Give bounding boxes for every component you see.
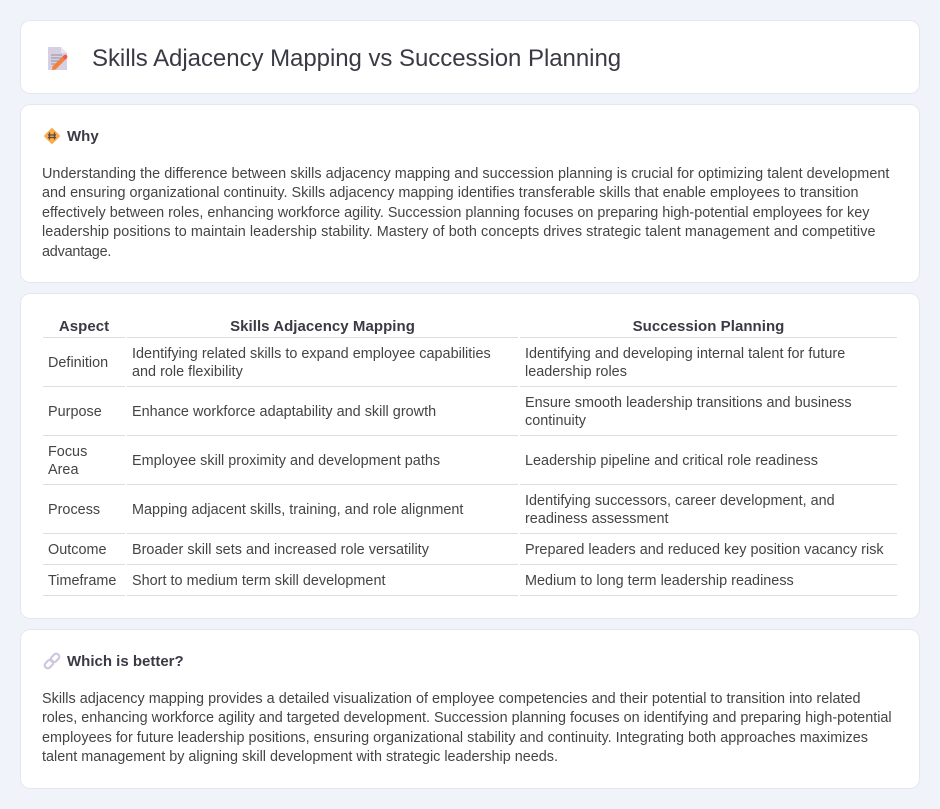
table row: process: readiness assessment xyxy=(525,511,669,527)
table row: purpose xyxy=(43,395,897,436)
table header row xyxy=(43,318,897,338)
table row: timeframe: Short to medium term skill development xyxy=(132,573,386,589)
table row: outcome: Broader skill sets and increased role versatility xyxy=(132,542,429,558)
text block: why paragraph: Understanding the difference between skills adjacency mapping and succession planning is crucial for optimizing talent development xyxy=(42,166,889,182)
table row: process: Identifying successors, career development, and xyxy=(525,493,835,509)
table row: focus area: Focus xyxy=(48,444,87,460)
icon: chain link xyxy=(44,652,60,670)
text block: why paragraph xyxy=(42,166,890,260)
table row: purpose: Enhance workforce adaptability and skill growth xyxy=(132,404,436,420)
table row: definition: Definition xyxy=(48,355,108,371)
table row: definition: and role flexibility xyxy=(132,364,243,380)
table header row: Succession Planning xyxy=(633,318,784,335)
table row: definition xyxy=(43,346,897,387)
table row: timeframe: Timeframe xyxy=(48,573,116,589)
heading: which is better: Which is better? xyxy=(67,653,184,670)
table row: focus area: Leadership pipeline and critical role readiness xyxy=(525,453,818,469)
panel: why xyxy=(20,104,920,283)
text block: why paragraph: effectively between roles, enhancing workforce agility. Succession planning focuses on preparing high-potential employees for key xyxy=(42,205,869,221)
text block: which is better paragraph: Skills adjacency mapping provides a detailed visualization of employee competencies and their potential to transition into related xyxy=(42,690,861,706)
panel: which is better xyxy=(20,629,920,789)
icon: document with pencil xyxy=(48,47,68,70)
table row: timeframe xyxy=(43,573,897,596)
table row: outcome: Prepared leaders and reduced key position vacancy risk xyxy=(525,542,884,558)
text block: which is better paragraph: employees for future leadership positions, ensuring organizational stability and continuity. Integrating both approaches maximizes xyxy=(42,730,868,746)
table row: focus area: Area xyxy=(48,462,78,478)
table row: process: Mapping adjacent skills, training, and role alignment xyxy=(132,502,463,518)
table row: definition: Identifying related skills to expand employee capabilities xyxy=(132,346,491,362)
table row: definition: leadership roles xyxy=(525,364,627,380)
table row: definition: Identifying and developing internal talent for future xyxy=(525,346,845,362)
table row: purpose: Ensure smooth leadership transitions and business xyxy=(525,395,852,411)
table row: process: Process xyxy=(48,502,100,518)
text block: which is better paragraph: roles, enhancing workforce agility and targeted development. Succession planning focuses on identifying and preparing high-potential xyxy=(42,710,892,726)
table header row: Skills Adjacency Mapping xyxy=(230,318,415,335)
text block: which is better paragraph xyxy=(42,690,892,765)
heading: why: Why xyxy=(67,128,99,145)
icon: construction diamond xyxy=(44,128,60,144)
panel: title header xyxy=(20,20,920,94)
table row: process xyxy=(43,493,897,534)
table row: purpose: continuity xyxy=(525,413,586,429)
table row: timeframe: Medium to long term leadership readiness xyxy=(525,573,794,589)
table row: focus area: Employee skill proximity and development paths xyxy=(132,453,440,469)
title: Skills Adjacency Mapping vs Succession Planning xyxy=(92,45,621,72)
table row: outcome xyxy=(43,542,897,565)
table row: outcome: Outcome xyxy=(48,542,107,558)
text block: which is better paragraph: talent management by aligning skill development with strategic leadership needs. xyxy=(42,749,558,765)
table row: focus area xyxy=(43,444,897,485)
table row: purpose: Purpose xyxy=(48,404,102,420)
text block: why paragraph: and ensuring organizational continuity. Skills adjacency mapping identifies transferable skills that enable employees to transition xyxy=(42,185,859,201)
text block: why paragraph: leadership positions to maintain leadership stability. Mastery of both concepts drives strategic talent management and competitive xyxy=(42,224,876,240)
text block: why paragraph: advantage. xyxy=(42,244,111,260)
panel: comparison table xyxy=(20,293,920,619)
table header row: Aspect xyxy=(59,318,109,335)
